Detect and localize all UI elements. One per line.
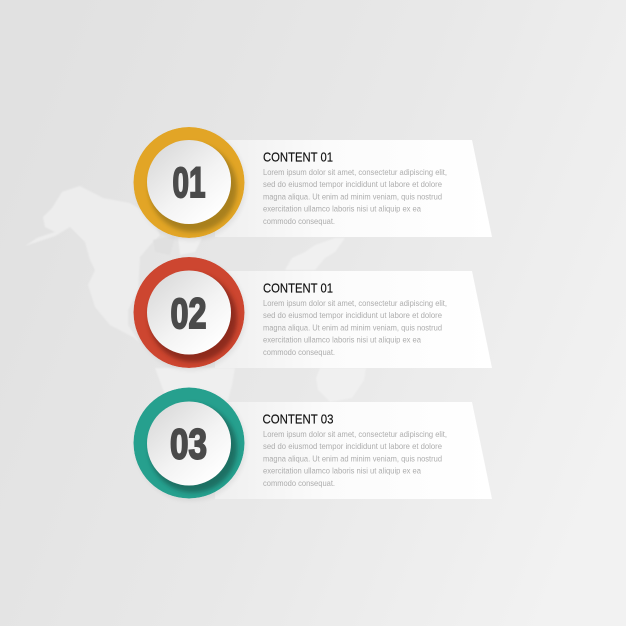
body text: Lorem ipsum dolor sit amet, consectetur adipiscing elit,: [263, 298, 447, 308]
banner card: [215, 402, 492, 499]
body text: Lorem ipsum dolor sit amet, consectetur adipiscing elit,: [263, 167, 447, 177]
body text: sed do eiusmod tempor incididunt ut labore et dolore: [263, 441, 442, 451]
heading: CONTENT 03: [262, 412, 334, 426]
body text: magna aliqua. Ut enim ad minim veniam, quis nostrud: [263, 322, 442, 332]
world map: [25, 186, 366, 425]
number 02: 02: [170, 290, 206, 338]
body text: exercitation ullamco laboris nisi ut aliquip ex ea: [263, 466, 421, 476]
inner disc: [147, 140, 231, 224]
body text: [263, 429, 447, 488]
banner card: [215, 140, 492, 237]
red ring: [134, 257, 244, 368]
map: south america: [155, 368, 235, 425]
circle shadow: [136, 130, 246, 240]
map: africa: [316, 368, 366, 402]
body text: magna aliqua. Ut enim ad minim veniam, quis nostrud: [263, 453, 442, 463]
infographic canvas: [0, 0, 492, 572]
body text: [263, 298, 447, 357]
inner disc: [147, 270, 231, 354]
gold ring: [134, 127, 244, 238]
body text: commodo consequat.: [263, 478, 335, 488]
body text: Lorem ipsum dolor sit amet, consectetur adipiscing elit,: [263, 429, 447, 439]
panel: content 02: [134, 257, 492, 370]
number 03: 03: [170, 420, 207, 468]
number 01: 01: [172, 159, 206, 207]
inner disc: [147, 402, 231, 486]
map: greenland region: [153, 237, 175, 255]
body text: exercitation ullamco laboris nisi ut aliquip ex ea: [263, 335, 421, 345]
map: europe: [285, 238, 345, 270]
circle shadow: [136, 390, 246, 501]
teal ring: [134, 388, 244, 498]
body text: commodo consequat.: [263, 347, 335, 357]
map: north america: [25, 186, 160, 343]
heading: CONTENT 01: [263, 282, 333, 296]
panel: content 01: [134, 127, 492, 240]
body text: [263, 167, 447, 226]
panel: content 03: [134, 388, 492, 501]
body text: exercitation ullamco laboris nisi ut aliquip ex ea: [263, 204, 421, 214]
heading: CONTENT 01: [263, 150, 333, 164]
banner card: [215, 271, 492, 368]
body text: commodo consequat.: [263, 216, 335, 226]
body text: sed do eiusmod tempor incididunt ut labore et dolore: [263, 179, 442, 189]
body text: magna aliqua. Ut enim ad minim veniam, quis nostrud: [263, 191, 442, 201]
body text: sed do eiusmod tempor incididunt ut labore et dolore: [263, 310, 442, 320]
map: north atlantic land: [178, 238, 202, 255]
circle shadow: [136, 260, 246, 370]
